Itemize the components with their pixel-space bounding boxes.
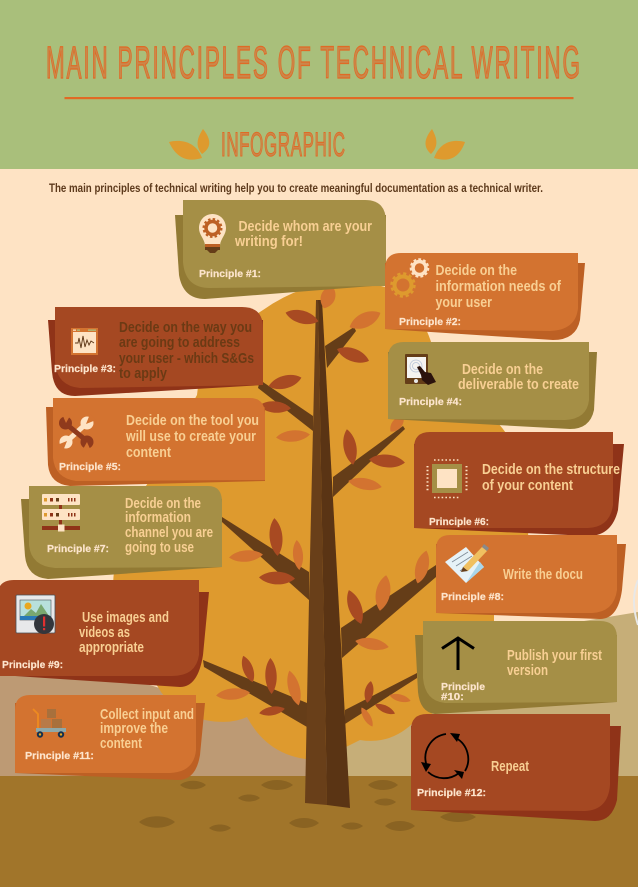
heading: will use to create your — [125, 429, 256, 445]
landscape — [0, 580, 638, 887]
icon: wrenches — [57, 414, 96, 451]
panel: principle 5 — [46, 398, 265, 486]
heading: Collect input and — [100, 707, 194, 723]
panel: principle 3 — [48, 307, 263, 396]
heading: Publish your first — [507, 648, 602, 664]
label: Principle #11: — [25, 750, 94, 762]
heading: going to use — [125, 540, 194, 556]
heading: improve the — [100, 721, 168, 737]
heading: to apply — [119, 366, 168, 382]
heading — [119, 320, 254, 382]
label: Principle #5: — [59, 461, 121, 473]
heading: Decide on the tool you — [126, 413, 259, 429]
icon: right leaves — [426, 129, 465, 160]
heading — [436, 263, 561, 311]
tree leaves — [216, 283, 433, 728]
icon: tablet and hand — [405, 354, 436, 385]
panel: principle 9 — [0, 580, 209, 687]
heading: deliverable to create — [458, 377, 579, 393]
panel: principle 7 — [21, 486, 222, 579]
panel: principle 1 — [175, 200, 386, 299]
panel: principle 6 — [414, 432, 624, 536]
heading — [458, 362, 579, 393]
heading: information — [125, 510, 191, 526]
label — [441, 681, 485, 703]
label: Principle #4: — [399, 396, 462, 408]
heading: of your content — [482, 478, 573, 494]
icon: cycle arrows — [421, 733, 468, 779]
heading: Decide on the way you — [119, 320, 252, 336]
subtitle: INFOGRAPHIC — [221, 126, 345, 164]
panel: principle 4 — [388, 342, 597, 429]
heading — [79, 610, 169, 656]
heading: Decide on the — [436, 263, 517, 279]
fallen leaves — [139, 780, 476, 832]
heading — [125, 496, 213, 556]
heading: appropriate — [79, 640, 144, 656]
heading — [482, 462, 620, 494]
heading: Use images and — [82, 610, 169, 626]
panel: principle 2 — [385, 253, 585, 340]
tree foliage — [113, 282, 528, 760]
label: Principle #8: — [441, 591, 504, 603]
label: Principle #6: — [429, 516, 489, 528]
heading: Decide whom are your — [238, 219, 372, 235]
label: Principle #12: — [417, 787, 486, 799]
icon: waveform window — [71, 328, 98, 355]
panel: principle 12 — [411, 714, 621, 821]
header band — [0, 0, 638, 169]
heading: content — [100, 736, 142, 752]
label: Principle #7: — [47, 543, 109, 555]
label: Principle #9: — [2, 659, 63, 671]
heading: Decide on the — [462, 362, 543, 378]
icon: cart with boxes — [33, 709, 66, 738]
heading: your user — [436, 295, 492, 311]
heading: Decide on the — [125, 496, 201, 512]
label: Principle #1: — [199, 268, 261, 280]
label: Principle — [441, 681, 485, 693]
title: MAIN PRINCIPLES OF TECHNICAL WRITING — [46, 38, 580, 88]
icon: note and pencil — [445, 544, 489, 583]
label: Principle #2: — [399, 316, 461, 328]
heading: Repeat — [491, 759, 529, 775]
heading: are going to address — [119, 335, 240, 351]
icon: up arrow — [442, 638, 474, 670]
icon: light bulb — [199, 214, 226, 253]
label: #10: — [441, 691, 464, 703]
heading: information needs of — [436, 279, 561, 295]
heading: channel you are — [125, 525, 213, 541]
icon: image with warning — [16, 595, 55, 634]
heading: content — [126, 445, 171, 461]
label: Principle #3: — [54, 363, 116, 375]
panel: principle 10 — [415, 621, 617, 714]
heading — [507, 648, 602, 679]
heading: your user - which S&Gs — [119, 351, 254, 367]
heading: Write the docu — [503, 567, 583, 583]
icon: left leaves — [169, 129, 209, 160]
heading: version — [507, 663, 548, 679]
icon: chip — [428, 460, 466, 498]
heading: videos as — [79, 625, 130, 641]
panel: principle 8 — [436, 535, 626, 619]
heading: writing for! — [234, 234, 303, 250]
heading — [234, 219, 372, 250]
panel: principle 11 — [15, 695, 205, 780]
icon: gears — [392, 259, 428, 296]
tree trunk and branches — [203, 300, 436, 808]
icon: server rack — [42, 494, 80, 532]
heading — [125, 413, 259, 461]
heading — [100, 707, 194, 752]
